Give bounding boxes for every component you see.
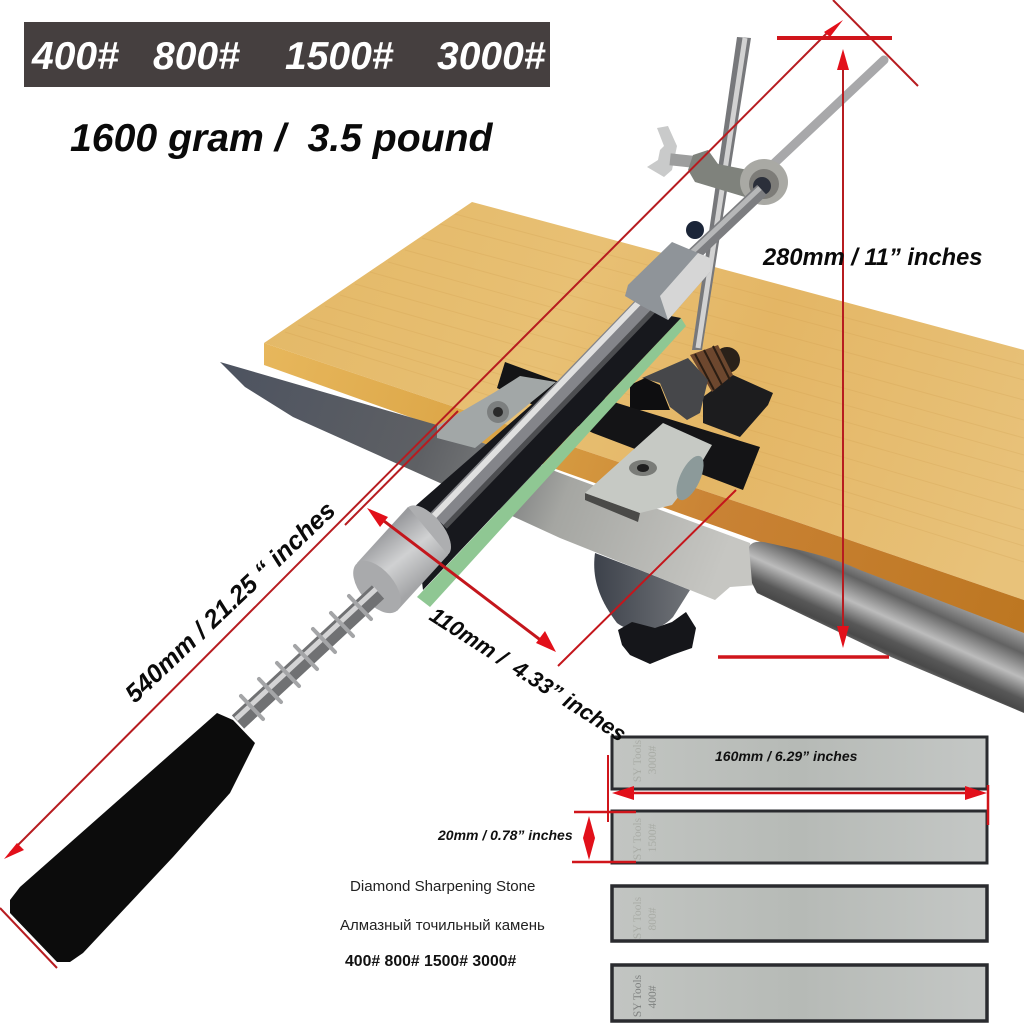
110mm label: 110mm / 4.33” inches [425, 602, 631, 747]
right clamp [585, 423, 712, 522]
stone width dimension [572, 812, 636, 862]
stone 3000# [612, 737, 987, 789]
green stone base [417, 318, 686, 607]
black foam handle [10, 713, 255, 962]
540mm label: 540mm / 21.25 “ inches [120, 496, 341, 708]
caption english: Diamond Sharpening Stone [350, 878, 535, 895]
header bar: grit labels: 3000# [437, 35, 546, 78]
base clamp under knife [594, 553, 690, 631]
width dimension: 110mm arrow [367, 490, 736, 666]
caption russian: Алмазный точильный камень [340, 917, 545, 934]
black guide rail [497, 362, 760, 490]
header bar: grit labels: 1500# [285, 35, 394, 78]
rod end bearing [740, 159, 788, 205]
lower guide rod [689, 188, 762, 258]
base plate [703, 375, 773, 437]
tightening knob [618, 612, 696, 664]
header bar: grit labels: 400# [31, 35, 119, 78]
stone 800# [612, 886, 987, 941]
knife handle [749, 542, 1024, 713]
end block [625, 242, 710, 320]
stone 1500#: 1500# [647, 823, 659, 852]
upper guide rod [765, 60, 884, 172]
stone 400# [612, 965, 987, 1021]
20mm label: 20mm / 0.78” inches [437, 827, 573, 843]
adjustable post [692, 37, 751, 350]
spring assembly [630, 345, 740, 420]
header bar: grit labels [24, 22, 550, 87]
wing nut and clamp [647, 126, 748, 197]
threaded rod with spring [236, 589, 378, 722]
stone 400#: SY Tools [632, 974, 644, 1017]
280mm label: 280mm / 11” inches [762, 245, 982, 271]
kitchen knife blade [220, 362, 757, 600]
stone 800#: SY Tools [632, 896, 644, 939]
main steel rod [433, 294, 659, 527]
wooden board [264, 202, 1024, 636]
height dimension: 280mm line [718, 38, 892, 657]
small knob on post [686, 221, 704, 239]
stone 400#: 400# [647, 985, 659, 1008]
160mm label: 160mm / 6.29” inches [715, 748, 858, 764]
stone 1500#: SY Tools [632, 817, 644, 860]
black stone holder [413, 310, 681, 590]
stone 3000#: 3000# [647, 745, 659, 774]
steel collar [344, 498, 459, 622]
caption grits: 400# 800# 1500# 3000# [345, 953, 517, 970]
stone 800#: 800# [647, 907, 659, 930]
stone 3000#: SY Tools [632, 739, 644, 782]
weight heading: 1600 gram / 3.5 pound [70, 117, 494, 160]
stone 1500# [612, 811, 987, 863]
stone length dimension [608, 755, 988, 825]
header bar: grit labels: 800# [153, 35, 240, 78]
left clamp [437, 376, 556, 448]
